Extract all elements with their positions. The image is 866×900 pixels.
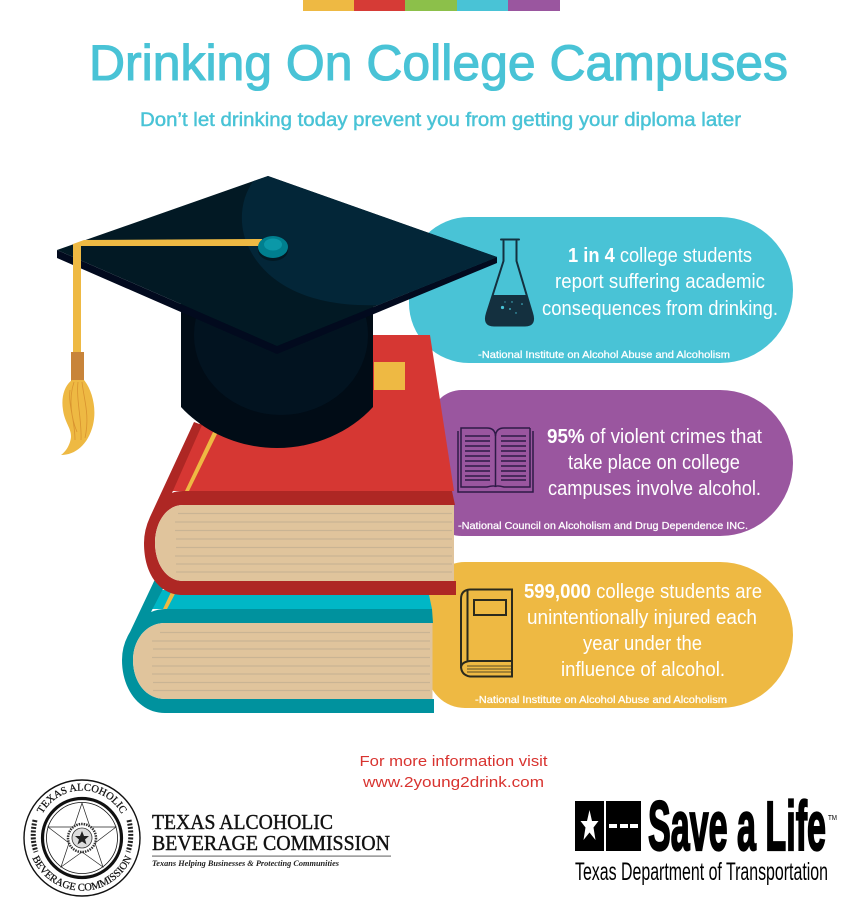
logo: TABC seal — [23, 779, 141, 897]
logo: Save a Life: TM — [828, 815, 837, 822]
cap body — [181, 304, 373, 448]
panel: academic consequences: consequences from drinking. — [542, 298, 778, 320]
call to action — [360, 753, 548, 791]
source: -National Council on Alcoholism and Drug Dependence INC. — [458, 520, 748, 532]
icon: open book — [458, 428, 533, 492]
panel: violent crimes: campuses involve alcohol. — [548, 478, 761, 500]
title: Drinking On College Campuses — [89, 35, 788, 91]
call to action: For more information visit — [360, 753, 548, 770]
logo: TABC seal: TEXAS ALCOHOLIC — [36, 784, 127, 814]
logo: TABC wordmark — [152, 810, 391, 868]
statistic text: 1 in 4 college students — [568, 245, 752, 267]
icon: closed book — [461, 590, 512, 676]
statistic text: 95% of violent crimes that — [547, 426, 762, 448]
statistic text: 599,000 college students are — [524, 581, 762, 603]
colour bar — [303, 0, 560, 11]
subtitle: Don’t let drinking today prevent you from getting your diploma later — [140, 110, 742, 131]
panel: unintentional injuries — [427, 562, 793, 708]
cap board — [57, 170, 505, 354]
panel: academic consequences — [409, 217, 793, 363]
tassel — [61, 239, 262, 455]
panel: unintentional injuries: unintentionally injured each — [527, 607, 757, 629]
teal book — [122, 575, 434, 713]
graduation cap — [57, 170, 505, 455]
logo: TABC wordmark: BEVERAGE COMMISSION — [152, 831, 390, 855]
red book — [144, 335, 456, 595]
source: -National Institute on Alcohol Abuse and Alcoholism — [478, 349, 730, 361]
icon: flask — [486, 240, 533, 326]
logo: TABC wordmark: Texans Helping Businesses & Protecting Communities — [152, 858, 340, 868]
source: -National Institute on Alcohol Abuse and Alcoholism — [475, 694, 727, 706]
panel: academic consequences: report suffering academic — [555, 271, 765, 293]
logo: TABC seal: BEVERAGE COMMISSION — [32, 854, 132, 891]
panel: unintentional injuries: influence of alcohol. — [561, 659, 725, 681]
panel: unintentional injuries: year under the — [583, 633, 702, 655]
cap button — [258, 236, 288, 261]
logo: TABC wordmark: TEXAS ALCOHOLIC — [152, 810, 333, 834]
call to action: www.2young2drink.com — [362, 774, 544, 791]
logo: Save a Life — [575, 787, 837, 886]
panel: violent crimes: take place on college — [568, 452, 740, 474]
panel: violent crimes — [430, 390, 793, 536]
